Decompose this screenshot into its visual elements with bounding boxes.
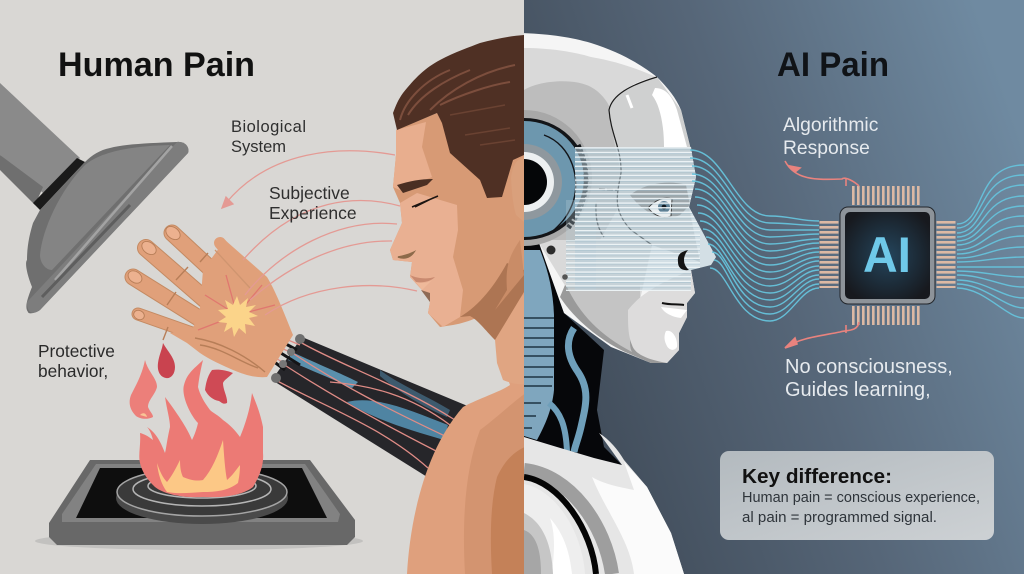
label: Protective behavior: behavior, — [38, 361, 108, 381]
panel: human pain background — [0, 0, 524, 574]
label: Biological System: System — [231, 138, 286, 156]
label: Subjective Experience: Experience — [269, 203, 357, 223]
label: Protective behavior: Protective — [38, 341, 115, 361]
illustration: scan lines across robot face — [566, 147, 720, 292]
illustration: left signal waves — [690, 150, 819, 321]
illustration: human face profile — [390, 113, 524, 340]
title: Human Pain: Human Pain — [58, 46, 255, 84]
label: Subjective Experience: Subjective — [269, 183, 350, 203]
robot eye socket and eye — [630, 183, 690, 218]
panel: AI pain background — [524, 0, 1024, 574]
illustration: burned arm with exposed nerves — [240, 322, 470, 480]
illustration: robot facial features — [546, 246, 689, 350]
icon: hot plate burner — [35, 460, 363, 550]
label: Algorithmic Response: Algorithmic — [783, 115, 879, 136]
arrow: chip to algorithmic response — [785, 161, 859, 186]
callout heading: Key difference: — [742, 465, 892, 488]
icon: pain starburst — [218, 296, 258, 337]
label: Biological System: Biological — [231, 118, 306, 136]
label: No consciousness, Guides learning: Guides learning, — [785, 379, 931, 401]
illustration: robot shoulder — [524, 433, 684, 574]
callout line one: Human pain = conscious experience, — [742, 490, 980, 506]
icon: flame — [130, 343, 263, 497]
illustration: human torso and neck — [407, 292, 524, 574]
icon: AI microchip — [829, 196, 946, 316]
illustration: robot neck — [524, 240, 622, 465]
callout line two: al pain = programmed signal. — [742, 510, 937, 526]
arrows: nerve signals between face and hand — [222, 151, 417, 315]
illustration: human hair — [393, 35, 524, 198]
label: No consciousness, Guides learning: No consciousness, — [785, 356, 953, 378]
illustration: human hand over flame — [126, 224, 293, 377]
illustration: robot head — [520, 33, 716, 363]
illustration: right signal waves — [957, 165, 1024, 318]
callout: key difference — [720, 451, 994, 540]
label: Algorithmic Response: Response — [783, 138, 870, 159]
icon: robot ear sensor disc — [524, 110, 592, 246]
title: AI Pain: AI Pain — [777, 46, 889, 84]
arrow: chip to no consciousness — [785, 322, 859, 348]
chip label: AI — [863, 227, 911, 283]
illustration: human ear — [511, 158, 524, 222]
icon: overhead lamp — [0, 83, 189, 313]
